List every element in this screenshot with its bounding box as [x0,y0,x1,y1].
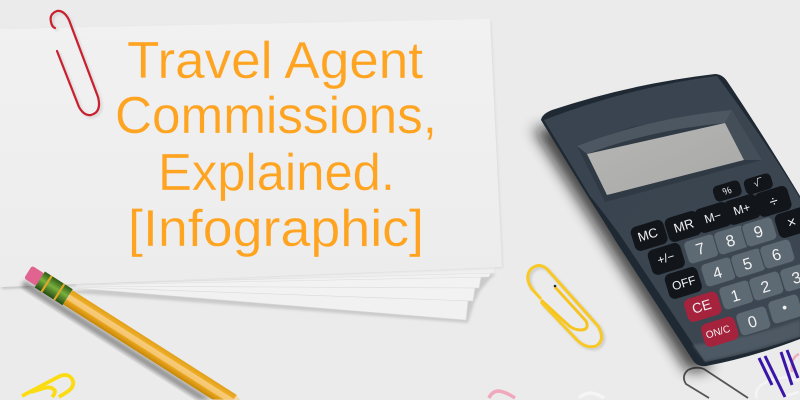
key labels: 5 [741,255,755,274]
key labels: 6 [770,246,784,265]
key labels: × [785,213,798,232]
icon: yellow paperclip centre [528,266,604,349]
title: [Infographic] [128,200,424,258]
calculator body [541,74,800,366]
screen bezel [577,110,762,202]
icon: blue paperclips under calculator [759,350,798,397]
title [115,32,437,258]
LCD screen [587,123,744,195]
title: Travel Agent [127,32,424,90]
key labels: √‾ [752,176,765,190]
icon: white paperclip bottom [579,393,604,398]
icon: white and pink paperclips under calculator [756,354,799,398]
key labels: 9 [752,223,766,242]
key labels: 0 [746,313,760,332]
key labels [636,176,800,342]
title: Explained. [158,144,395,202]
top sheet [0,19,502,287]
key labels: • [780,299,789,316]
key labels: MC [636,225,660,245]
key labels: 2 [759,278,773,297]
icon: pink paperclip [489,391,515,398]
key labels: % [721,185,733,198]
icon: black paperclip [684,368,748,398]
key labels: M− [703,208,723,226]
title: Commissions, [115,87,437,145]
key labels: ON/C [705,324,732,342]
calculator [533,74,800,372]
key labels: 1 [729,287,743,306]
key labels: 8 [724,232,738,251]
icon: yellow paperclip lower left [22,375,73,397]
red keys [683,290,740,348]
pencil [19,264,242,400]
key labels: MR [672,216,696,236]
key labels: ÷ [767,192,780,211]
pencil body [63,290,237,400]
calculator keys [629,172,800,348]
icon: red paperclip [51,11,101,117]
key labels: 4 [711,264,725,283]
eraser [24,266,45,286]
key labels: +/− [655,249,676,267]
number keys [682,216,800,337]
key labels: CE [690,296,713,317]
key labels: OFF [670,273,697,293]
paper stack [0,19,503,323]
function keys [629,172,800,300]
ferrule [35,272,73,305]
key labels: M+ [732,200,752,218]
key labels: 7 [694,240,708,259]
